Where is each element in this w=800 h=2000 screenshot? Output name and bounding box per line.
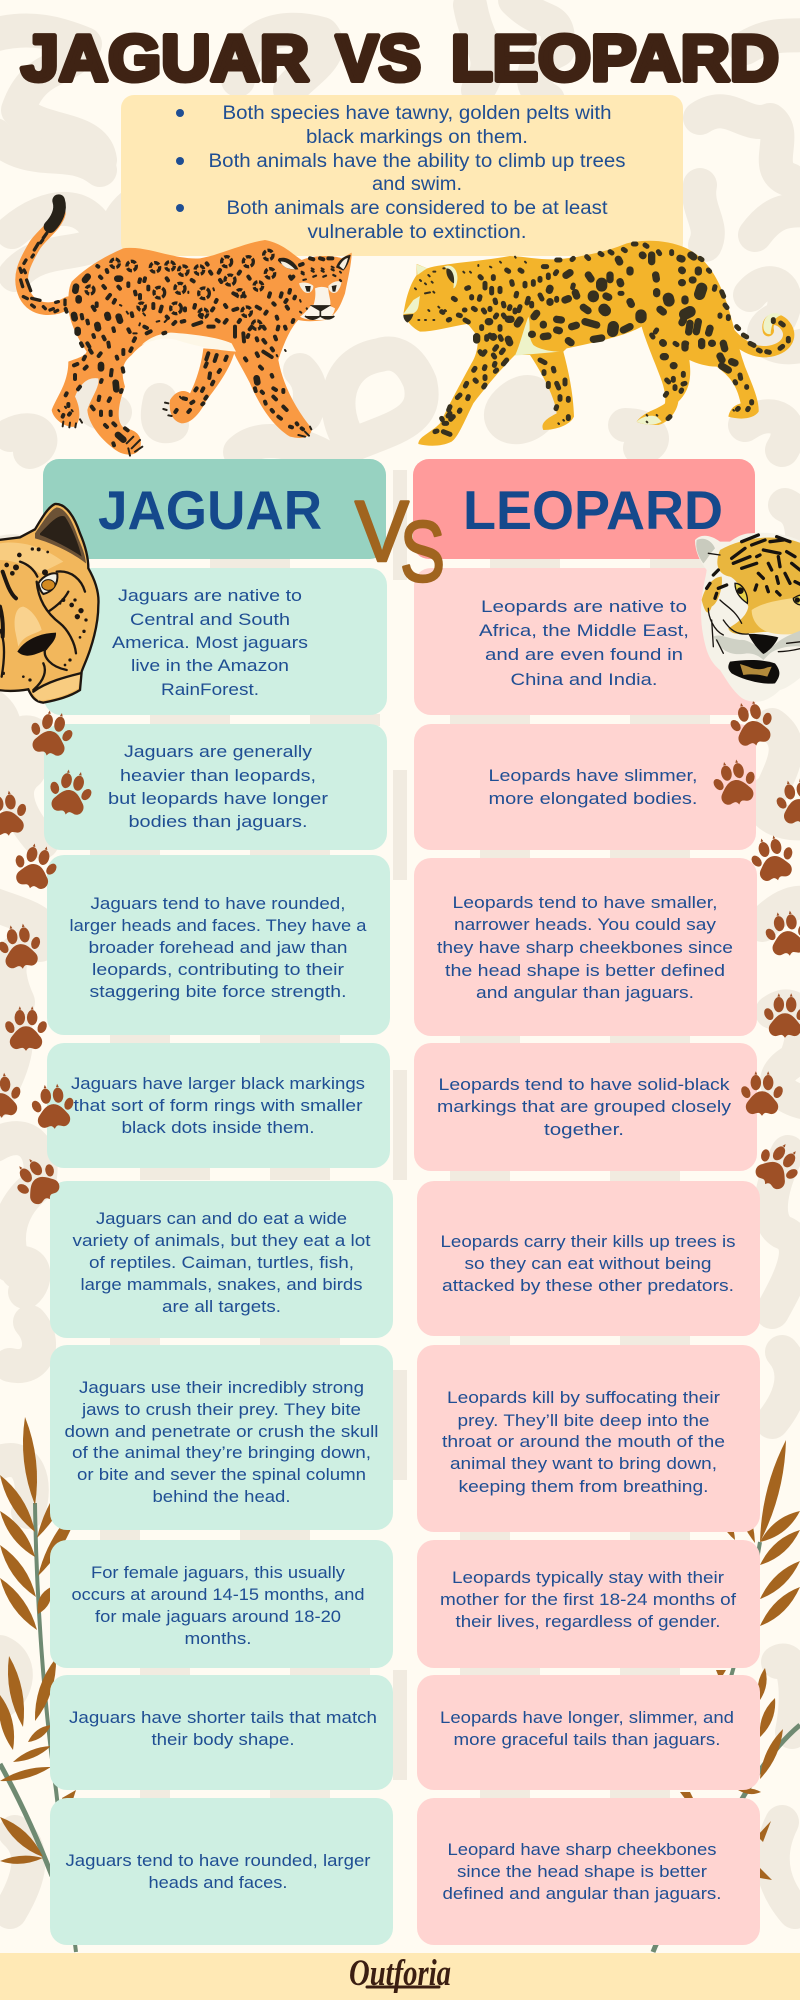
card: jaguar hunting: Jaguars use their incredibly strong	[79, 1378, 364, 1397]
illustration: jaguar	[20, 201, 352, 456]
card: jaguar maturity: months.	[184, 1629, 252, 1648]
card: leopard habitat	[414, 568, 756, 715]
card: leopard maturity	[417, 1540, 760, 1668]
card: jaguar head: staggering bite force strength.	[90, 982, 346, 1001]
card: leopard hunting	[417, 1345, 760, 1532]
card: leopard body	[414, 724, 756, 850]
illustration: leopard portrait	[695, 533, 800, 702]
tail tip	[763, 313, 782, 334]
title: JAGUAR	[21, 22, 309, 94]
card: jaguar habitat	[44, 568, 387, 715]
leopard spots	[415, 244, 788, 434]
card: leopard hunting: prey. They’ll bite deep into the	[458, 1411, 710, 1430]
card: jaguar diet	[50, 1181, 393, 1338]
card: leopard habitat: Africa, the Middle East,	[479, 621, 689, 640]
card: jaguar face: Jaguars tend to have rounded, larger	[66, 1851, 371, 1870]
text: hand-lettered VS badge: V	[355, 484, 409, 580]
card: leopard tail: Leopards have longer, slimmer, and	[440, 1708, 734, 1727]
card: jaguar habitat: Central and South	[130, 610, 290, 629]
card: jaguar face	[50, 1798, 393, 1945]
card: leopard diet: so they can eat without being	[464, 1254, 712, 1273]
card: jaguar diet: Jaguars can and do eat a wide	[96, 1209, 347, 1228]
card: leopard markings: together.	[544, 1120, 624, 1139]
card: leopard markings: Leopards tend to have solid-black	[438, 1075, 730, 1094]
icons: paw prints	[0, 697, 800, 1212]
foliage: right plants	[653, 1440, 800, 1952]
card: jaguar body: bodies than jaguars.	[128, 812, 308, 831]
panel: shared traits: black markings on them.	[306, 127, 528, 148]
card: jaguar tail: their body shape.	[152, 1730, 294, 1749]
card: leopard maturity: their lives, regardless of gender.	[456, 1612, 720, 1631]
card: leopard head	[414, 858, 757, 1036]
card: leopard head: the head shape is better defined	[445, 961, 725, 980]
card: jaguar hunting: jaws to crush their prey. They bite	[81, 1400, 361, 1419]
foliage: left plants	[0, 1417, 79, 1952]
card: leopard body: Leopards have slimmer,	[488, 766, 698, 785]
title: LEOPARD	[451, 22, 779, 94]
card: leopard tail	[417, 1675, 760, 1790]
card: jaguar markings	[47, 1043, 390, 1168]
card: jaguar maturity: For female jaguars, this usually	[91, 1563, 346, 1582]
card: leopard maturity: Leopards typically stay with their	[452, 1568, 724, 1587]
card: leopard face: since the head shape is better	[457, 1862, 707, 1881]
tail tip	[50, 201, 60, 227]
tail of leopard	[717, 313, 789, 352]
card: jaguar habitat: Jaguars are native to	[118, 586, 302, 605]
belly	[142, 333, 236, 352]
card: jaguar hunting	[50, 1345, 393, 1530]
card: jaguar body	[44, 724, 387, 850]
card: jaguar maturity	[50, 1540, 393, 1668]
heading: jaguar	[43, 459, 386, 559]
card: jaguar tail	[50, 1675, 393, 1790]
heading: jaguar: JAGUAR	[98, 479, 322, 541]
jaguar rosettes	[86, 250, 275, 329]
card: jaguar maturity: for male jaguars around 18-20	[95, 1607, 341, 1626]
body of jaguar	[52, 240, 352, 455]
card: jaguar head: broader forehead and jaw than	[88, 938, 348, 957]
card: leopard face	[417, 1798, 760, 1945]
far legs of jaguar	[170, 348, 235, 423]
card: jaguar body: heavier than leopards,	[120, 766, 316, 785]
jaguar spots	[20, 227, 341, 456]
card: leopard head: Leopards tend to have smaller,	[452, 893, 718, 912]
illustration: leopard	[403, 241, 789, 446]
panel: shared traits: vulnerable to extinction.	[308, 222, 526, 243]
card: jaguar maturity: occurs at around 14-15 months, and	[72, 1585, 364, 1604]
illustration: jaguar portrait	[0, 504, 98, 703]
card: jaguar habitat: America. Most jaguars	[112, 633, 308, 652]
card: jaguar head	[47, 855, 390, 1035]
panel: shared traits	[121, 95, 683, 256]
title: VS	[336, 22, 421, 94]
card: leopard markings: markings that are grouped closely	[437, 1097, 732, 1116]
heading: leopard: LEOPARD	[463, 479, 723, 541]
card: jaguar hunting: of the animal they’re bringing down,	[72, 1443, 371, 1462]
leopard cream patches	[403, 264, 662, 425]
card: leopard habitat: and are even found in	[485, 645, 683, 664]
panel: shared traits: Both animals are considered to be at least	[226, 198, 608, 219]
card: jaguar head: leopards, contributing to their	[92, 960, 344, 979]
card: leopard hunting: animal they want to bring down,	[450, 1454, 717, 1473]
panel: shared traits: Both species have tawny, golden pelts with	[222, 103, 612, 124]
panel: shared traits: and swim.	[372, 174, 462, 195]
card: jaguar hunting: behind the head.	[152, 1487, 290, 1506]
card: jaguar body: Jaguars are generally	[124, 742, 313, 761]
card: leopard hunting: keeping them from breathing.	[458, 1477, 708, 1496]
heading: leopard	[413, 459, 755, 559]
card: leopard tail: more graceful tails than jaguars.	[454, 1730, 720, 1749]
card: leopard diet: attacked by these other predators.	[442, 1276, 734, 1295]
card: jaguar face: heads and faces.	[148, 1873, 288, 1892]
card: leopard hunting: Leopards kill by suffocating their	[447, 1388, 720, 1407]
card: jaguar markings: black dots inside them.	[122, 1118, 314, 1137]
card: leopard habitat: Leopards are native to	[481, 597, 687, 616]
panel: shared traits: Both animals have the ability to climb up trees	[208, 151, 626, 172]
jaguar face	[279, 255, 351, 320]
card: jaguar body: but leopards have longer	[108, 789, 328, 808]
card: leopard body: more elongated bodies.	[488, 789, 698, 808]
card: leopard habitat: China and India.	[510, 670, 658, 689]
card: jaguar diet: large mammals, snakes, and birds	[80, 1275, 362, 1294]
title	[21, 22, 779, 94]
card: leopard diet	[417, 1181, 760, 1336]
footer: Outforia	[349, 1953, 451, 1994]
card: jaguar markings: that sort of form rings with smaller	[74, 1096, 363, 1115]
tail of jaguar	[22, 213, 68, 309]
card: jaguar diet: of reptiles. Caiman, turtles, fish,	[89, 1253, 354, 1272]
card: jaguar habitat: RainForest.	[161, 680, 259, 699]
card: jaguar head: Jaguars tend to have rounded,	[90, 894, 346, 913]
card: jaguar diet: variety of animals, but they eat a lot	[72, 1231, 371, 1250]
card: jaguar hunting: down and penetrate or crush the skull	[64, 1422, 378, 1441]
card: leopard head: narrower heads. You could say	[454, 915, 717, 934]
card: leopard maturity: mother for the first 18-24 months of	[440, 1590, 736, 1609]
card: leopard head: they have sharp cheekbones since	[437, 938, 733, 957]
card: jaguar hunting: or bite and sever the spinal column	[77, 1465, 366, 1484]
body of leopard	[403, 241, 759, 446]
footer	[0, 1953, 800, 2000]
card: leopard head: and angular than jaguars.	[476, 983, 694, 1002]
card: jaguar habitat: live in the Amazon	[131, 656, 289, 675]
text: hand-lettered VS badge	[355, 484, 445, 600]
card: jaguar markings: Jaguars have larger black markings	[71, 1074, 365, 1093]
card: leopard markings	[414, 1043, 757, 1171]
leopard nose and ear	[403, 268, 454, 323]
card: jaguar head: larger heads and faces. They have a	[70, 916, 367, 935]
card: leopard face: defined and angular than jaguars.	[442, 1884, 722, 1903]
card: jaguar tail: Jaguars have shorter tails that match	[69, 1708, 377, 1727]
card: leopard diet: Leopards carry their kills up trees is	[440, 1232, 736, 1251]
card: jaguar diet: are all targets.	[162, 1297, 281, 1316]
card: leopard face: Leopard have sharp cheekbones	[448, 1840, 716, 1859]
text: hand-lettered VS badge: S	[400, 504, 445, 600]
card: leopard hunting: throat or around the mouth of the	[442, 1432, 725, 1451]
